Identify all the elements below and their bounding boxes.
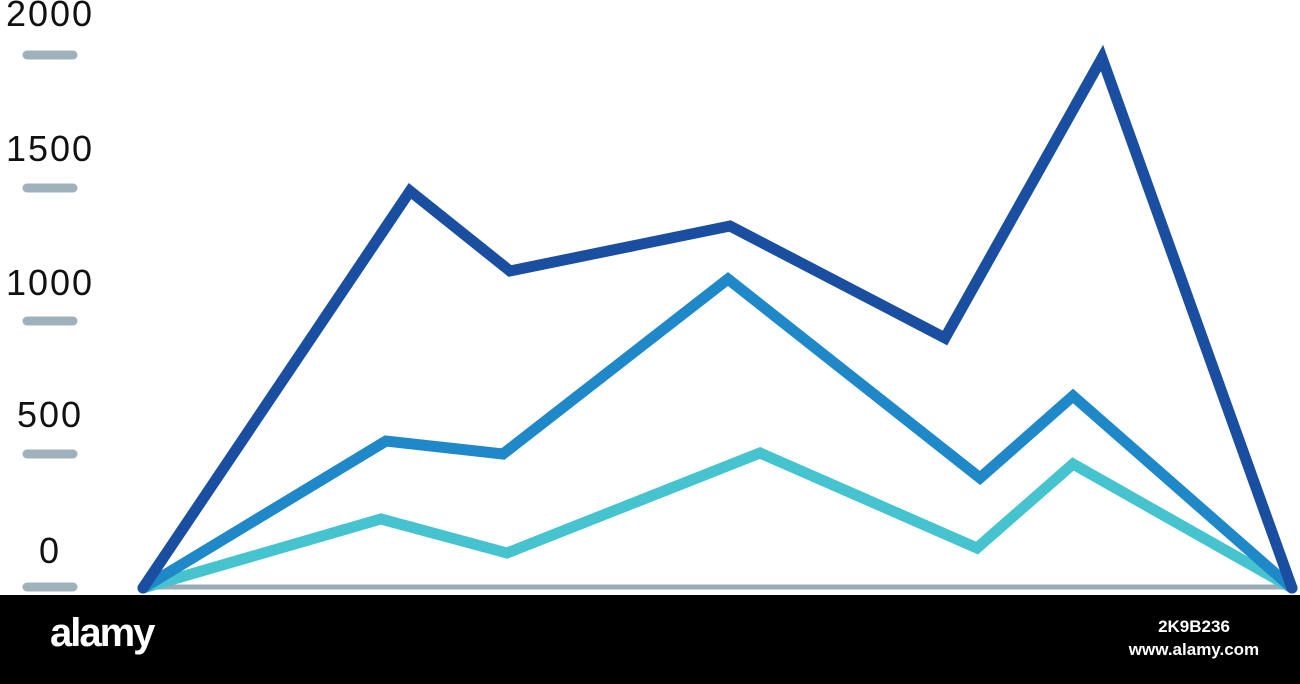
y-axis labels	[6, 0, 94, 571]
watermark footer bar	[0, 595, 1300, 684]
website: www.alamy.com	[1129, 640, 1259, 659]
baseline	[143, 584, 1292, 590]
y-axis labels: 0	[39, 530, 61, 571]
alamy logo: alamy	[50, 611, 153, 655]
y-axis labels: 1500	[6, 128, 94, 169]
y-axis ticks	[27, 55, 73, 587]
y-axis labels: 1000	[6, 262, 94, 303]
series: mid blue	[143, 279, 1292, 588]
series: teal	[143, 453, 1292, 588]
series: dark blue	[143, 58, 1292, 588]
y-axis labels: 500	[17, 394, 83, 435]
image id: 2K9B236	[1158, 617, 1230, 636]
